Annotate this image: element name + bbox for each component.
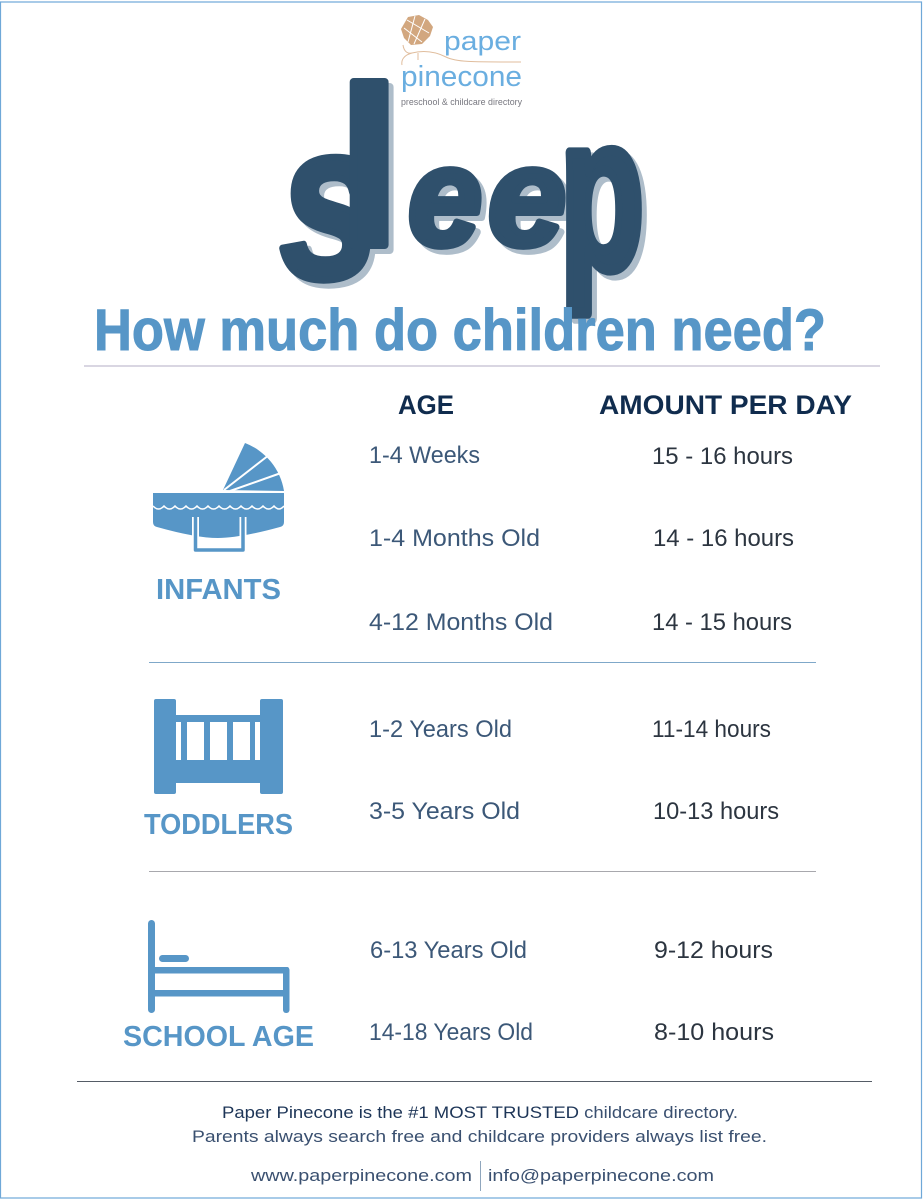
footer statement: Parents always search free and childcare providers always list free. [192,1127,767,1146]
toddlers hours 10-13: 10-13 hours [653,798,779,825]
label: infants: INFANTS [156,574,281,606]
infants hours 14-16: 14 - 16 hours [653,525,794,552]
infants hours 14-15: 14 - 15 hours [652,609,792,636]
toddlers age 1-2 years: 1-2 Years Old [369,716,512,743]
infants age 1-4 months: 1-4 Months Old [369,525,540,552]
title: sleep script word: l [338,41,401,293]
title: sleep script word: s [280,74,380,326]
school age 6-13 years: 6-13 Years Old [370,937,527,964]
logo word: paper: paper [444,26,521,56]
label: school age: SCHOOL AGE [123,1021,314,1053]
column heading: age: AGE [398,390,454,420]
toddlers age 3-5 years: 3-5 Years Old [369,798,520,825]
school age hours 8-10: 8-10 hours [654,1019,774,1046]
title: sleep script word: e [408,118,482,275]
logo tagline: preschool & childcare directory [401,97,522,107]
panel: toddlers [144,699,293,841]
infants age 4-12 months: 4-12 Months Old [369,609,553,636]
infants age 1-4 weeks: 1-4 Weeks [369,442,480,469]
icon: bassinet [153,443,284,550]
footer contact details: www.paperpinecone.com [250,1166,472,1185]
label: toddlers: TODDLERS [144,809,293,841]
toddlers hours 11-14: 11-14 hours [652,716,771,743]
logo divider branch [402,45,521,65]
logo word: pinecone: pinecone [401,61,522,93]
panel: infants [153,443,284,606]
school age 14-18 years: 14-18 Years Old [369,1019,533,1046]
footer contact details [250,1161,714,1191]
column heading: amount per day: AMOUNT PER DAY [599,390,852,420]
icon: pinecone [401,15,433,45]
footer statement: Paper Pinecone is the #1 MOST TRUSTED childcare directory. [222,1103,738,1122]
infants hours 15-16: 15 - 16 hours [652,443,793,470]
footer contact details: info@paperpinecone.com [488,1166,714,1185]
footer statement [192,1103,767,1146]
heading: How much do children need?: How much do children need? [94,298,826,363]
title: sleep script word: e [488,118,566,275]
title: sleep script word: p [560,72,644,315]
icon: bed [148,920,290,1013]
logo: Paper Pinecone [401,15,522,107]
school age hours 9-12: 9-12 hours [654,937,773,964]
panel: school age [123,920,314,1053]
icon: crib [154,699,283,794]
